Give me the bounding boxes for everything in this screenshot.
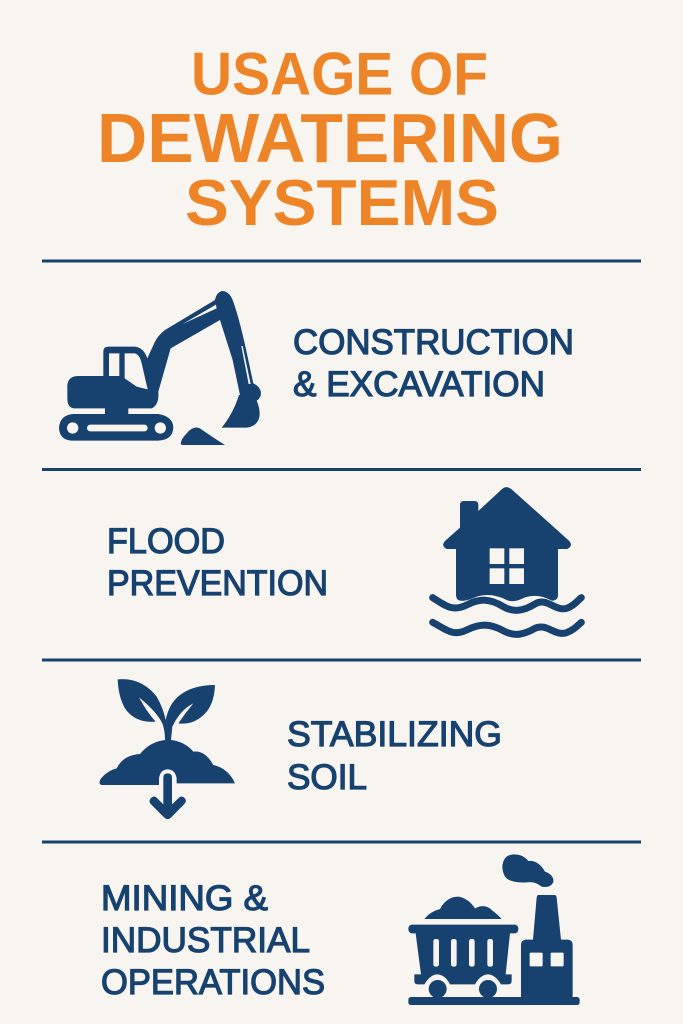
label: flood prevention: PREVENTION — [107, 564, 328, 603]
icon: excavator — [59, 291, 261, 445]
label: construction & excavation: & EXCAVATION — [293, 365, 545, 404]
label: flood prevention — [107, 522, 328, 603]
label: stabilizing soil — [287, 715, 502, 797]
icon: seedling with soil and arrow — [99, 679, 235, 819]
icon: mine cart and factory — [408, 854, 580, 1005]
label: construction & excavation: CONSTRUCTION — [293, 323, 574, 362]
title: DEWATERING — [97, 99, 563, 177]
title: USAGE OF — [191, 40, 488, 108]
label: mining & industrial operations — [101, 879, 325, 1002]
label: construction & excavation — [293, 323, 574, 404]
label: stabilizing soil: SOIL — [287, 758, 367, 797]
label: mining & industrial operations: MINING & — [101, 879, 268, 918]
label: mining & industrial operations: INDUSTRIAL — [101, 921, 310, 960]
label: mining & industrial operations: OPERATIONS — [101, 963, 325, 1002]
title — [97, 40, 563, 239]
title: SYSTEMS — [185, 166, 499, 239]
label: flood prevention: FLOOD — [107, 522, 225, 561]
icon: flooded house — [433, 487, 581, 634]
label: stabilizing soil: STABILIZING — [287, 715, 502, 754]
